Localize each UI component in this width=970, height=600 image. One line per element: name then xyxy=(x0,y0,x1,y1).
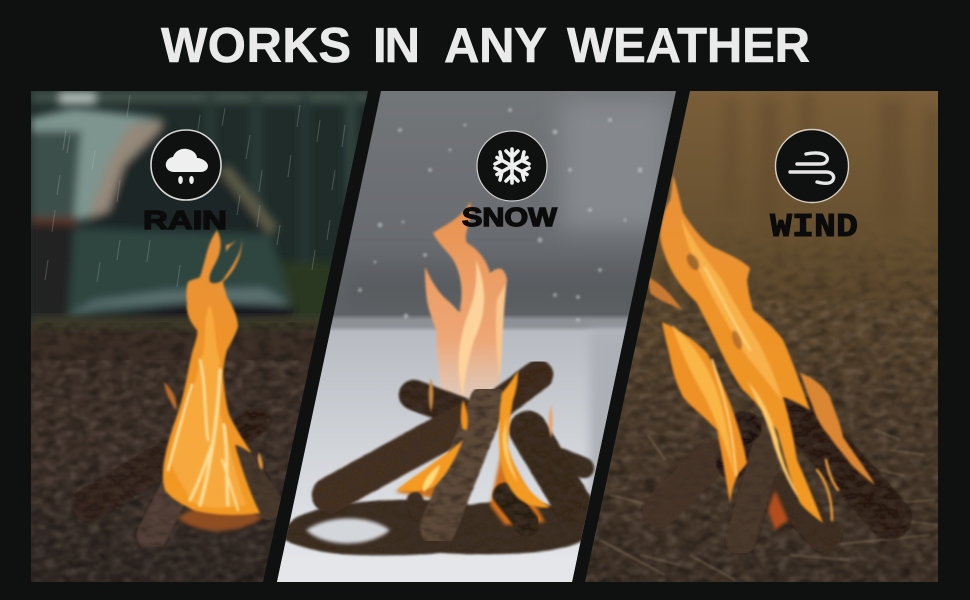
flame: wind xyxy=(648,175,875,523)
tent xyxy=(31,108,295,326)
icon: rain cloud xyxy=(151,130,221,200)
flame: snow (back) xyxy=(425,202,507,398)
title: IN xyxy=(373,19,420,73)
flame: snow (front) xyxy=(397,370,552,508)
twigs xyxy=(600,430,938,580)
label: rain: RAIN xyxy=(143,205,227,235)
icon: wind xyxy=(776,130,848,202)
panel: snow xyxy=(276,91,680,586)
rain streaks xyxy=(45,95,345,287)
title: WEATHER xyxy=(567,19,810,73)
title: ANY xyxy=(444,19,546,73)
flame: rain xyxy=(163,230,263,515)
embers: snow xyxy=(395,442,545,525)
dirt patch xyxy=(276,500,596,556)
logs xyxy=(660,410,890,540)
logs xyxy=(88,420,268,535)
logs xyxy=(330,375,584,510)
icon: snowflake xyxy=(477,131,547,201)
label: snow: SNOW xyxy=(462,202,558,232)
label: wind: WIND xyxy=(770,209,858,246)
title: WORKS xyxy=(161,19,351,73)
snowflakes xyxy=(358,108,652,322)
panel: rain xyxy=(31,91,371,588)
panel: wind xyxy=(585,91,940,584)
